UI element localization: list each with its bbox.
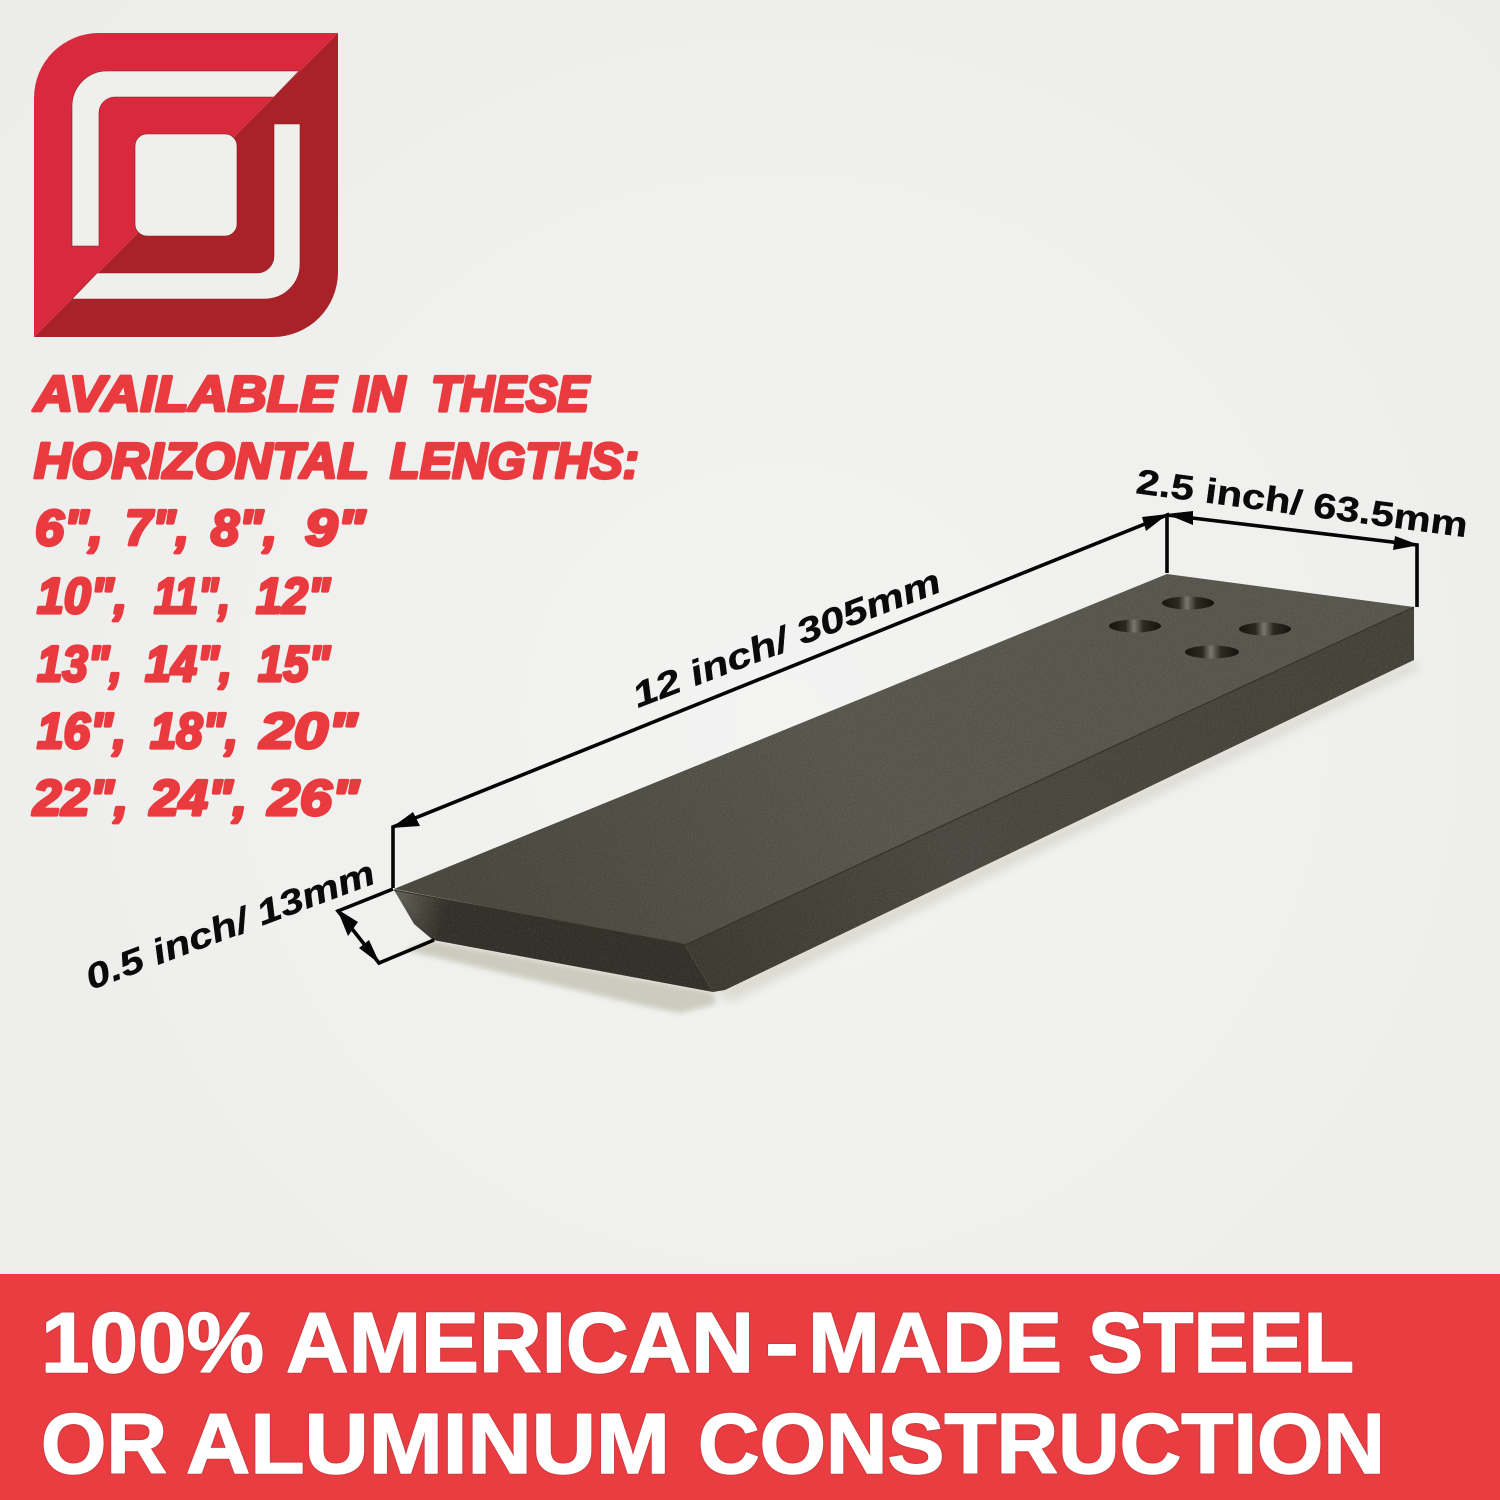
- banner line two: CONSTRUCTION: [698, 1397, 1385, 1492]
- lengths row 2: 11",: [154, 568, 230, 624]
- lengths row 4: 20": [259, 703, 359, 759]
- lengths row 5: 22",: [32, 770, 128, 826]
- banner background: [0, 1274, 1500, 1500]
- banner line one: MADE: [808, 1296, 1062, 1391]
- banner line one: STEEL: [1088, 1296, 1354, 1391]
- arrowhead thickness top: [337, 909, 358, 936]
- arrowhead width right: [1393, 536, 1419, 550]
- arrowhead thickness bottom: [359, 940, 380, 964]
- plate shadow under bevel: [405, 941, 716, 1013]
- steel plate product: [394, 574, 1420, 1013]
- lengths row 1: 9": [305, 500, 367, 556]
- dimension lines and arrows: [337, 511, 1419, 964]
- lengths row 3: 14",: [145, 636, 232, 692]
- lengths row 1: 7",: [125, 500, 189, 556]
- arrowhead length left: [391, 812, 420, 828]
- dimension label: thickness: 0.5 inch/ 13mm: [80, 853, 380, 997]
- plate surface grain: [394, 574, 1414, 992]
- heading: available lengths: THESE: [431, 366, 591, 422]
- mounting holes: [1109, 596, 1291, 658]
- arrowhead length right: [1142, 514, 1168, 531]
- plate top face: [394, 574, 1414, 945]
- lengths row 2: 12": [256, 568, 331, 624]
- lengths row 1: 6",: [35, 500, 103, 556]
- lengths row 3: 15": [258, 636, 331, 692]
- thickness dimension line: [338, 889, 434, 963]
- lengths row 2: 10",: [37, 568, 127, 624]
- heading: available lengths: IN: [353, 366, 406, 422]
- hole 2: [1109, 620, 1161, 632]
- lengths row 5: 26": [267, 770, 360, 826]
- logo: [34, 33, 338, 337]
- banner line one: 100%: [41, 1296, 264, 1391]
- plate front bevel: [394, 890, 713, 992]
- heading: available lengths: AVAILABLE: [32, 366, 338, 422]
- logo: lower cut-out strip: [72, 124, 300, 299]
- banner line two: OR: [41, 1397, 167, 1492]
- dimension label: length: 12 inch/ 305mm: [627, 562, 946, 715]
- lengths row 4: 16",: [37, 703, 126, 759]
- banner line one: AMERICAN: [286, 1296, 754, 1391]
- banner line two: ALUMINUM: [186, 1397, 670, 1492]
- available lengths text block: [32, 366, 639, 826]
- plate edge lines: [394, 607, 1414, 945]
- logo: dark red half: [34, 33, 338, 337]
- arrowheads: [337, 511, 1419, 964]
- plate side face: [685, 607, 1414, 992]
- length dimension line: [393, 515, 1167, 888]
- hole 3: [1239, 622, 1291, 636]
- arrowhead width left: [1166, 511, 1193, 525]
- hole 1: [1162, 596, 1214, 610]
- logo: upper cut-out strip: [72, 71, 299, 246]
- lengths row 4: 18",: [150, 703, 238, 759]
- heading line two: LENGTHS:: [390, 433, 639, 489]
- lengths row 1: 8",: [211, 500, 277, 556]
- dimension label: width: 2.5 inch/ 63.5mm: [1134, 462, 1470, 545]
- lengths row 5: 24",: [149, 770, 247, 826]
- bottom banner: [0, 1274, 1500, 1500]
- plate shadow under side: [713, 660, 1420, 1002]
- logo: light red half: [34, 33, 338, 337]
- width dimension line: [1167, 515, 1417, 607]
- lengths row 3: 13",: [37, 636, 122, 692]
- banner line one: -: [765, 1296, 799, 1391]
- heading line two: HORIZONTAL: [34, 433, 368, 489]
- logo: centre square: [135, 134, 237, 236]
- hole 4: [1185, 646, 1239, 658]
